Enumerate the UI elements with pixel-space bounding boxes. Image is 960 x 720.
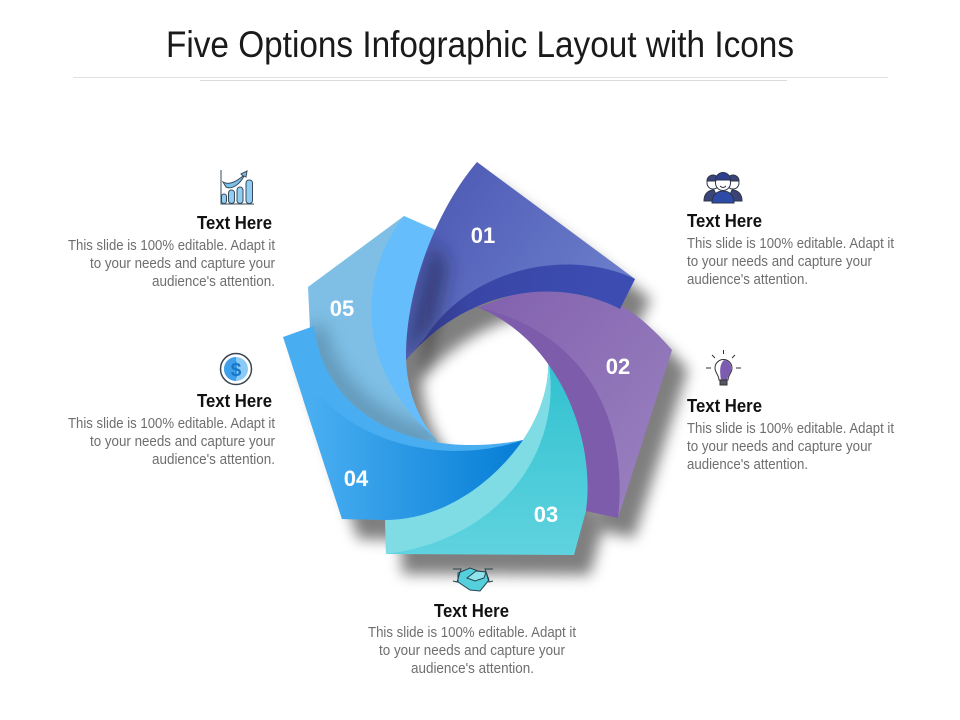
body 04: to your needs and capture your [90,434,275,450]
body 04 [68,416,275,468]
blade 04 gradient body [303,398,523,520]
body 05: to your needs and capture your [90,256,275,272]
text block: option 01 [687,211,894,288]
body 01: audience's attention. [687,272,808,288]
number 01: 01 [471,223,495,248]
text block: option 03 [368,601,576,677]
text block: option 04 [68,391,275,468]
body 02 [687,421,894,473]
body 02: This slide is 100% editable. Adapt it [687,421,894,437]
number 03: 03 [534,502,558,527]
blade drop shadows [299,182,688,575]
blade 01 dark side shading [400,240,448,365]
body 01 [687,236,894,288]
icon: light bulb [706,350,741,385]
icon: handshake [453,568,493,591]
icon: team [704,173,742,203]
body 02: audience's attention. [687,457,808,473]
body 05 [68,238,275,290]
blade 05 light band [371,216,440,440]
blade 04 blue [283,326,523,520]
heading 05: Text Here [197,213,272,233]
text block: option 02 [687,396,894,473]
blade 02 purple [470,285,672,518]
body 01: to your needs and capture your [687,254,872,270]
blade 05 shading [314,326,437,442]
text block: option 05 [68,213,275,290]
blade 01 dark band [406,265,635,360]
icon: growth chart [221,170,254,204]
blade 03 light band [385,358,551,554]
blade 02 dark band [477,307,620,518]
body 04: audience's attention. [152,452,275,468]
heading 01: Text Here [687,211,762,231]
body 05: audience's attention. [152,274,275,290]
body 01: This slide is 100% editable. Adapt it [687,236,894,252]
number 05: 05 [330,296,354,321]
number 04: 04 [344,466,369,491]
title: Five Options Infographic Layout with Icons [166,24,794,65]
body 05: This slide is 100% editable. Adapt it [68,238,275,254]
body 03 [368,625,576,677]
icon: dollar coin: $ [231,360,242,381]
body 03: audience's attention. [411,661,534,677]
body 03: to your needs and capture your [379,643,565,659]
heading 03: Text Here [434,601,509,621]
blade 05 sky [308,216,440,455]
blade 03 teal [385,358,589,555]
heading 02: Text Here [687,396,762,416]
number 02: 02 [606,354,630,379]
blade 01 indigo [400,162,635,365]
icon: dollar coin [220,354,252,384]
body 04: This slide is 100% editable. Adapt it [68,416,275,432]
body 02: to your needs and capture your [687,439,872,455]
heading 04: Text Here [197,391,272,411]
body 03: This slide is 100% editable. Adapt it [368,625,576,641]
